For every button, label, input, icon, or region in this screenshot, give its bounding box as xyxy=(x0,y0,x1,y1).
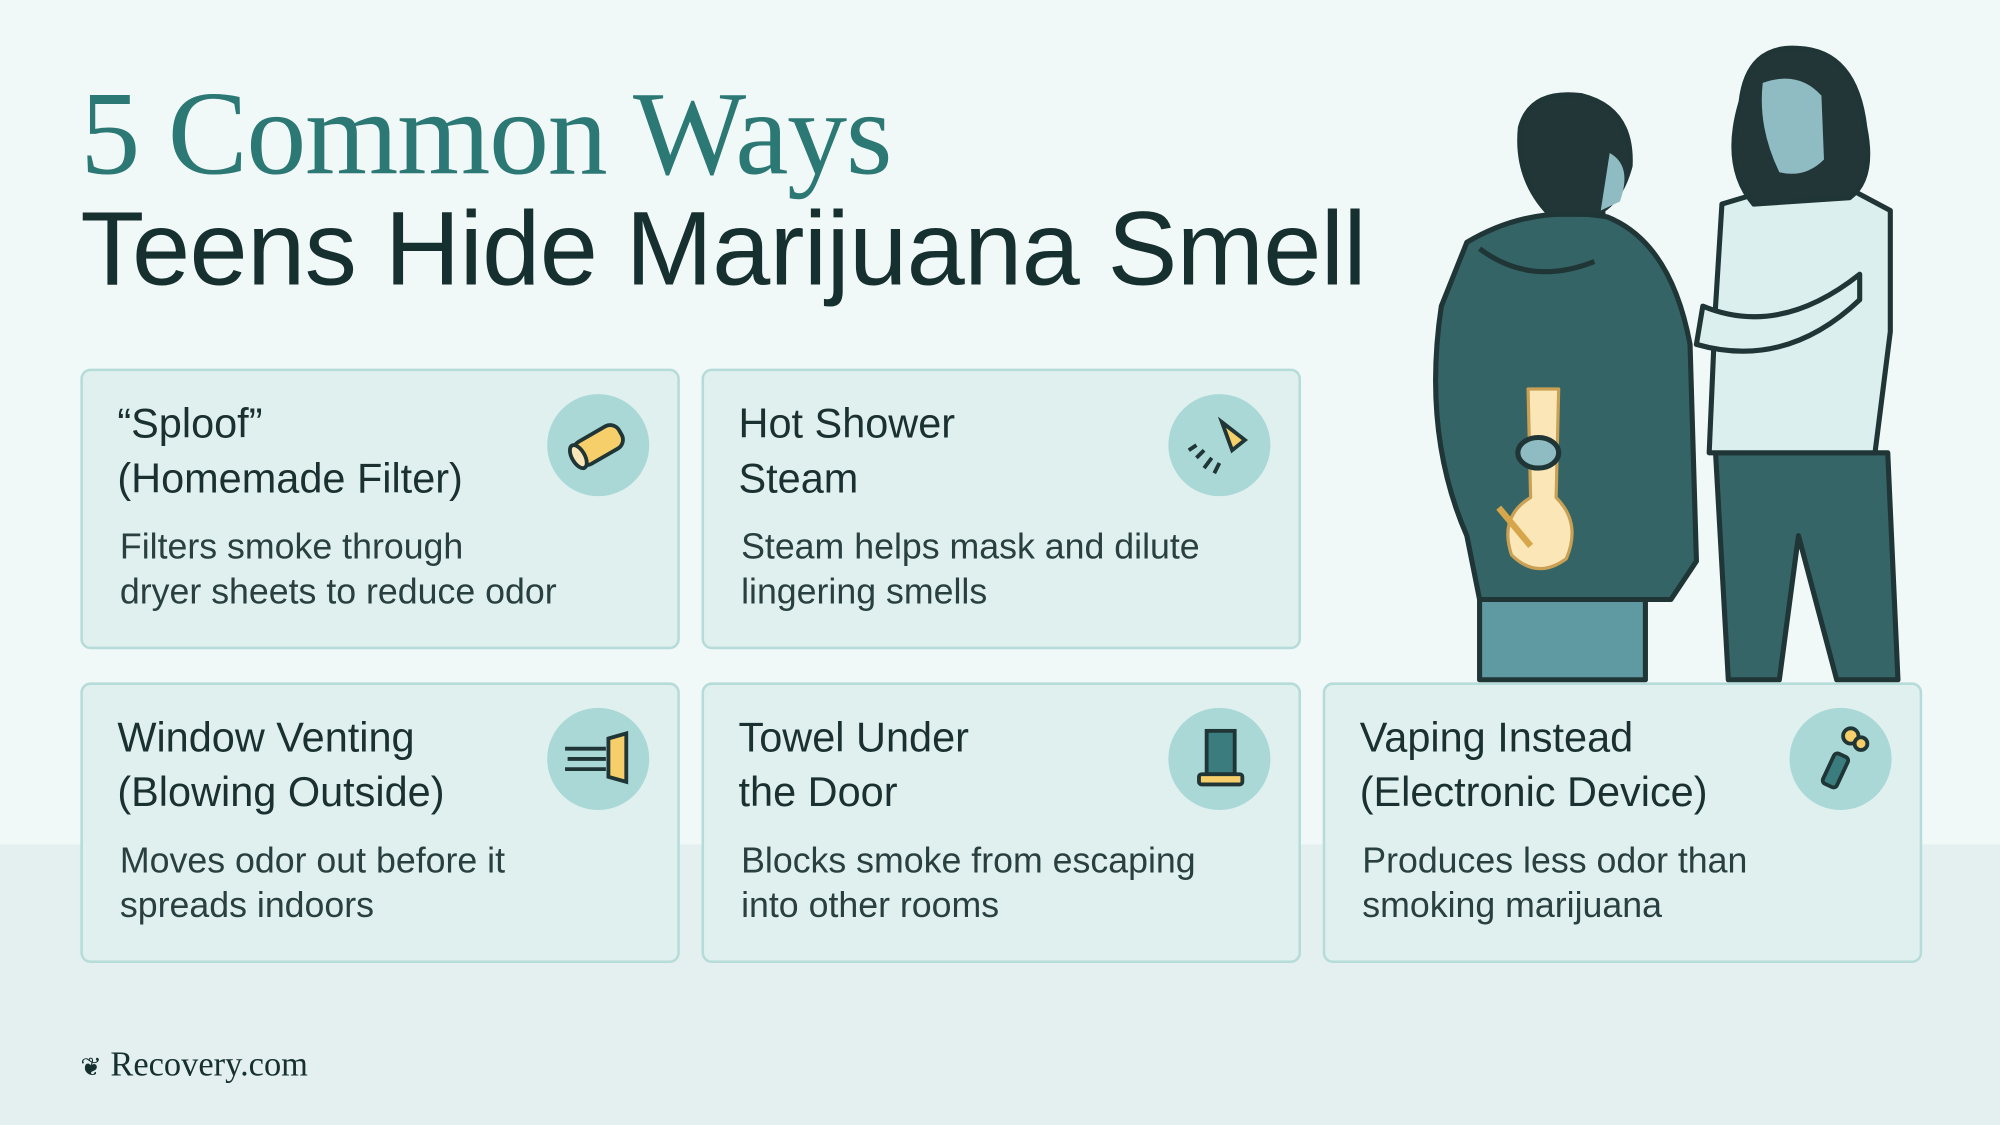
card: shower xyxy=(702,369,1301,649)
boy head xyxy=(1520,95,1630,214)
card: shower: Steam helps mask and dilute xyxy=(741,527,1200,566)
title: 5 Common Ways xyxy=(80,68,891,200)
woman head xyxy=(1734,48,1868,204)
illustration: teen and parent xyxy=(1433,46,1900,682)
card: towel: the Door xyxy=(739,769,898,815)
card: shower: lingering smells xyxy=(741,571,987,611)
icon: door xyxy=(1168,708,1270,810)
card: sploof xyxy=(80,369,680,649)
card: window xyxy=(80,682,680,963)
card: sploof: Filters smoke through xyxy=(120,527,463,566)
icon: window xyxy=(547,708,649,810)
card: vaping: Produces less odor than xyxy=(1362,841,1747,880)
card: window: Moves odor out before it xyxy=(120,841,505,880)
woman pants xyxy=(1716,453,1898,680)
title xyxy=(80,68,1366,307)
boy neck xyxy=(1546,191,1605,230)
card: shower: Steam xyxy=(739,455,858,501)
card: sploof: (Homemade Filter) xyxy=(117,455,463,501)
card: sploof: dryer sheets to reduce odor xyxy=(120,571,557,611)
card: window: Window Venting xyxy=(117,714,415,760)
card: sploof: “Sploof” xyxy=(117,401,263,446)
logo: ❦ Recovery.com xyxy=(80,1045,308,1083)
card: vaping: (Electronic Device) xyxy=(1360,769,1708,815)
card: shower: Hot Shower xyxy=(739,401,955,446)
card: window: spreads indoors xyxy=(120,885,374,925)
card: towel: Blocks smoke from escaping xyxy=(741,841,1196,880)
boy pants xyxy=(1480,599,1645,680)
card: towel: into other rooms xyxy=(741,885,999,925)
card: towel: Towel Under xyxy=(739,714,969,760)
card: vaping xyxy=(1323,682,1922,963)
woman shirt xyxy=(1709,185,1890,453)
card: vaping: Vaping Instead xyxy=(1360,714,1633,760)
card: window: (Blowing Outside) xyxy=(117,769,445,815)
boy hoodie xyxy=(1436,214,1696,599)
icon: shower xyxy=(1168,394,1270,496)
bong xyxy=(1508,389,1572,569)
icon: vape xyxy=(1790,708,1892,810)
icon: tube xyxy=(547,394,649,496)
card: towel xyxy=(702,682,1301,963)
card: vaping: smoking marijuana xyxy=(1362,885,1662,925)
title: Teens Hide Marijuana Smell xyxy=(80,191,1366,307)
